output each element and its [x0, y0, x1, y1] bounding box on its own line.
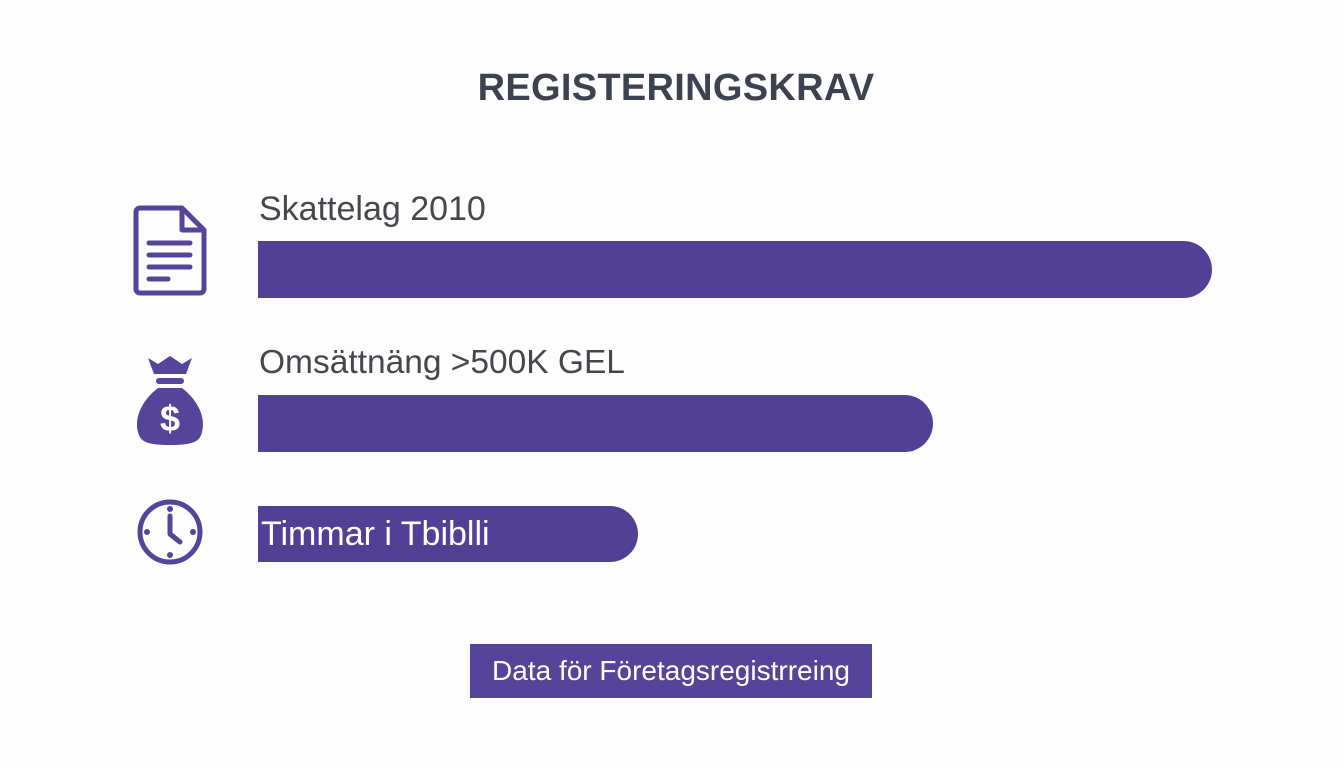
button: data source: Data för Företagsregistrreing	[492, 655, 850, 686]
bar 2	[258, 395, 933, 452]
bar 1	[258, 241, 1212, 298]
icon: money bag	[136, 356, 203, 445]
bar 3 with label: Timmar i Tbiblli	[261, 515, 490, 553]
title: REGISTERINGSKRAV	[478, 67, 874, 109]
button: data source	[470, 644, 872, 698]
bar 3 with label	[258, 506, 638, 562]
icon: money bag: $	[160, 398, 180, 439]
label: Skattelag: Skattelag 2010	[259, 190, 486, 228]
label: Omsättnäng: Omsättnäng >500K GEL	[259, 344, 625, 381]
icon: document	[134, 206, 206, 296]
icon: clock	[138, 500, 202, 564]
